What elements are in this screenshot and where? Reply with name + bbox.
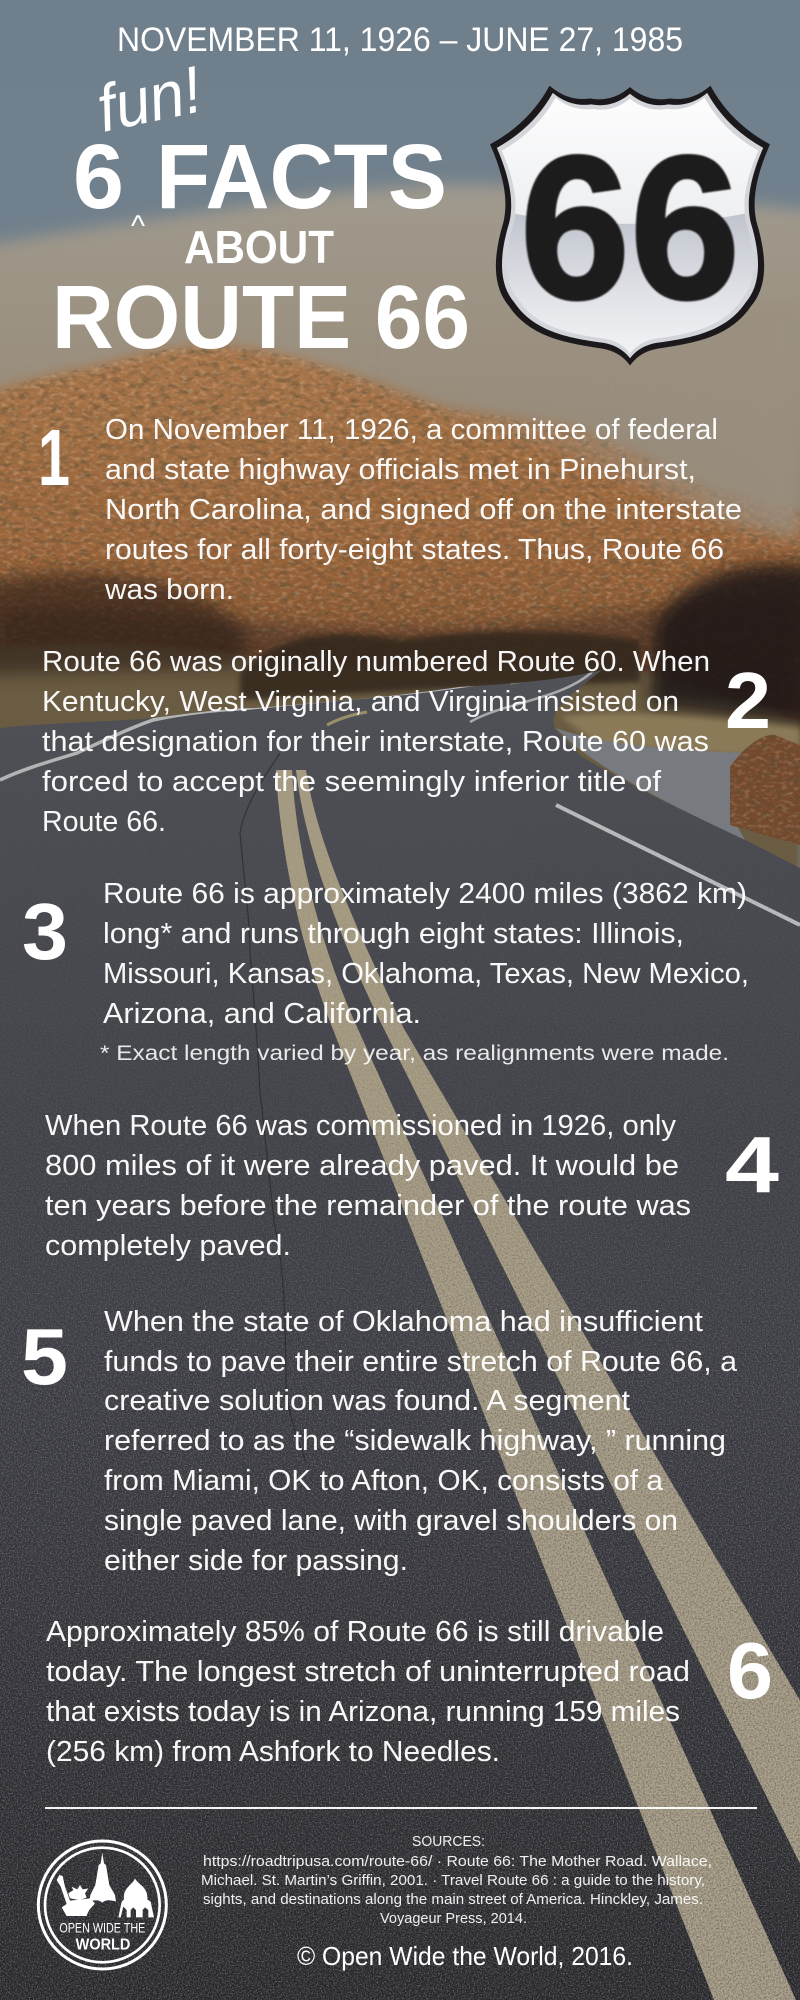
number 5: 5	[21, 1312, 68, 1401]
copyright line: © Open Wide the World, 2016.	[297, 1941, 633, 1971]
fact 6 text: today. The longest stretch of uninterrupted road	[46, 1656, 690, 1688]
icon: Route 66 highway shield	[490, 86, 770, 366]
fact 3	[22, 878, 749, 1065]
icon: Statue of Liberty	[57, 1875, 95, 1916]
word: ROUTE 66: ROUTE 66	[52, 268, 470, 368]
date range heading: NOVEMBER 11, 1926 – JUNE 27, 1985	[117, 21, 683, 59]
fact 5 text	[104, 1306, 738, 1577]
fact 3 text: Missouri, Kansas, Oklahoma, Texas, New Mexico,	[103, 958, 749, 990]
fact 5 text: funds to pave their entire stretch of Route 66, a	[104, 1346, 738, 1378]
fact 1 text: and state highway officials met in Pinehurst,	[105, 454, 696, 486]
fact 2 text: Route 66.	[42, 806, 166, 838]
logo: Open Wide the World	[38, 1841, 166, 1969]
caret mark: ^	[131, 210, 145, 243]
fact 3 text	[103, 878, 749, 1030]
word: ABOUT: ABOUT	[184, 221, 334, 273]
footnote: * Exact length varied by year, as realignments were made.	[100, 1042, 729, 1065]
fact 4 text	[45, 1110, 691, 1262]
fact 1 text	[104, 414, 742, 606]
logo text: OPEN WIDE THE	[59, 1921, 145, 1936]
fact 1 text: was born.	[104, 574, 234, 606]
icon: Eiffel tower	[89, 1853, 116, 1903]
sources block: SOURCES:	[412, 1833, 485, 1850]
fact 6 text: that exists today is in Arizona, running 159 miles	[46, 1696, 680, 1728]
number 6: 6	[727, 1626, 773, 1715]
fact 2 text: Route 66 was originally numbered Route 60. When	[42, 646, 710, 678]
fact 2 text: forced to accept the seemingly inferior title of	[42, 766, 662, 798]
fact 3 text: Arizona, and California.	[103, 998, 421, 1030]
fact 4 text: 800 miles of it were already paved. It would be	[45, 1150, 679, 1182]
number 2: 2	[725, 656, 771, 745]
big number 6: 6	[73, 126, 124, 228]
fact 5 text: referred to as the “sidewalk highway, ” running	[104, 1425, 726, 1457]
fact 1 text: North Carolina, and signed off on the interstate	[105, 494, 742, 526]
fact 6 text: (256 km) from Ashfork to Needles.	[46, 1736, 500, 1768]
number 1: 1	[38, 413, 70, 502]
fact 1 text: On November 11, 1926, a committee of federal	[105, 414, 718, 446]
fact 5	[21, 1306, 738, 1577]
fact 5 text: either side for passing.	[104, 1545, 408, 1577]
fact 3 text: Route 66 is approximately 2400 miles (3862 km)	[103, 878, 747, 910]
number 3: 3	[22, 887, 68, 976]
fact 3 text: long* and runs through eight states: Illinois,	[103, 918, 684, 950]
sources block: https://roadtripusa.com/route-66/ · Route 66: The Mother Road. Wallace,	[203, 1853, 712, 1870]
fact 5 text: from Miami, OK to Afton, OK, consists of a	[104, 1465, 664, 1497]
title: 6 fun facts about Route 66	[52, 52, 470, 368]
fact 6 text: Approximately 85% of Route 66 is still drivable	[46, 1616, 664, 1648]
fact 2 text: that designation for their interstate, Route 60 was	[42, 726, 709, 758]
fact 2	[42, 646, 771, 838]
fact 2 text	[42, 646, 710, 838]
fact 1	[38, 413, 742, 606]
sources block: Michael. St. Martin’s Griffin, 2001. · Travel Route 66 : a guide to the history,	[201, 1872, 705, 1889]
handwritten word: fun!: fun!	[91, 52, 208, 146]
fact 1 text: routes for all forty-eight states. Thus, Route 66	[105, 534, 724, 566]
fact 5 text: creative solution was found. A segment	[104, 1385, 630, 1417]
fact 4 text: completely paved.	[45, 1230, 291, 1262]
logo: Open Wide the World: WORLD	[76, 1936, 130, 1953]
sources block: Voyageur Press, 2014.	[380, 1910, 527, 1927]
fact 4	[45, 1110, 780, 1262]
fact 4 text: When Route 66 was commissioned in 1926, only	[45, 1110, 676, 1142]
fact 6	[46, 1616, 773, 1768]
fact 5 text: single paved lane, with gravel shoulders on	[104, 1505, 678, 1537]
sources block	[201, 1833, 712, 1927]
number 4: 4	[725, 1120, 780, 1209]
icon: domed building	[118, 1878, 154, 1917]
fact 2 text: Kentucky, West Virginia, and Virginia insisted on	[42, 686, 679, 718]
fact 4 text: ten years before the remainder of the route was	[45, 1190, 691, 1222]
word: FACTS: FACTS	[156, 126, 447, 228]
fact 5 text: When the state of Oklahoma had insufficient	[104, 1306, 703, 1338]
shield number 66: 66	[520, 114, 740, 342]
fact 6 text	[46, 1616, 690, 1768]
sources block: sights, and destinations along the main street of America. Hinckley, James.	[203, 1891, 703, 1908]
